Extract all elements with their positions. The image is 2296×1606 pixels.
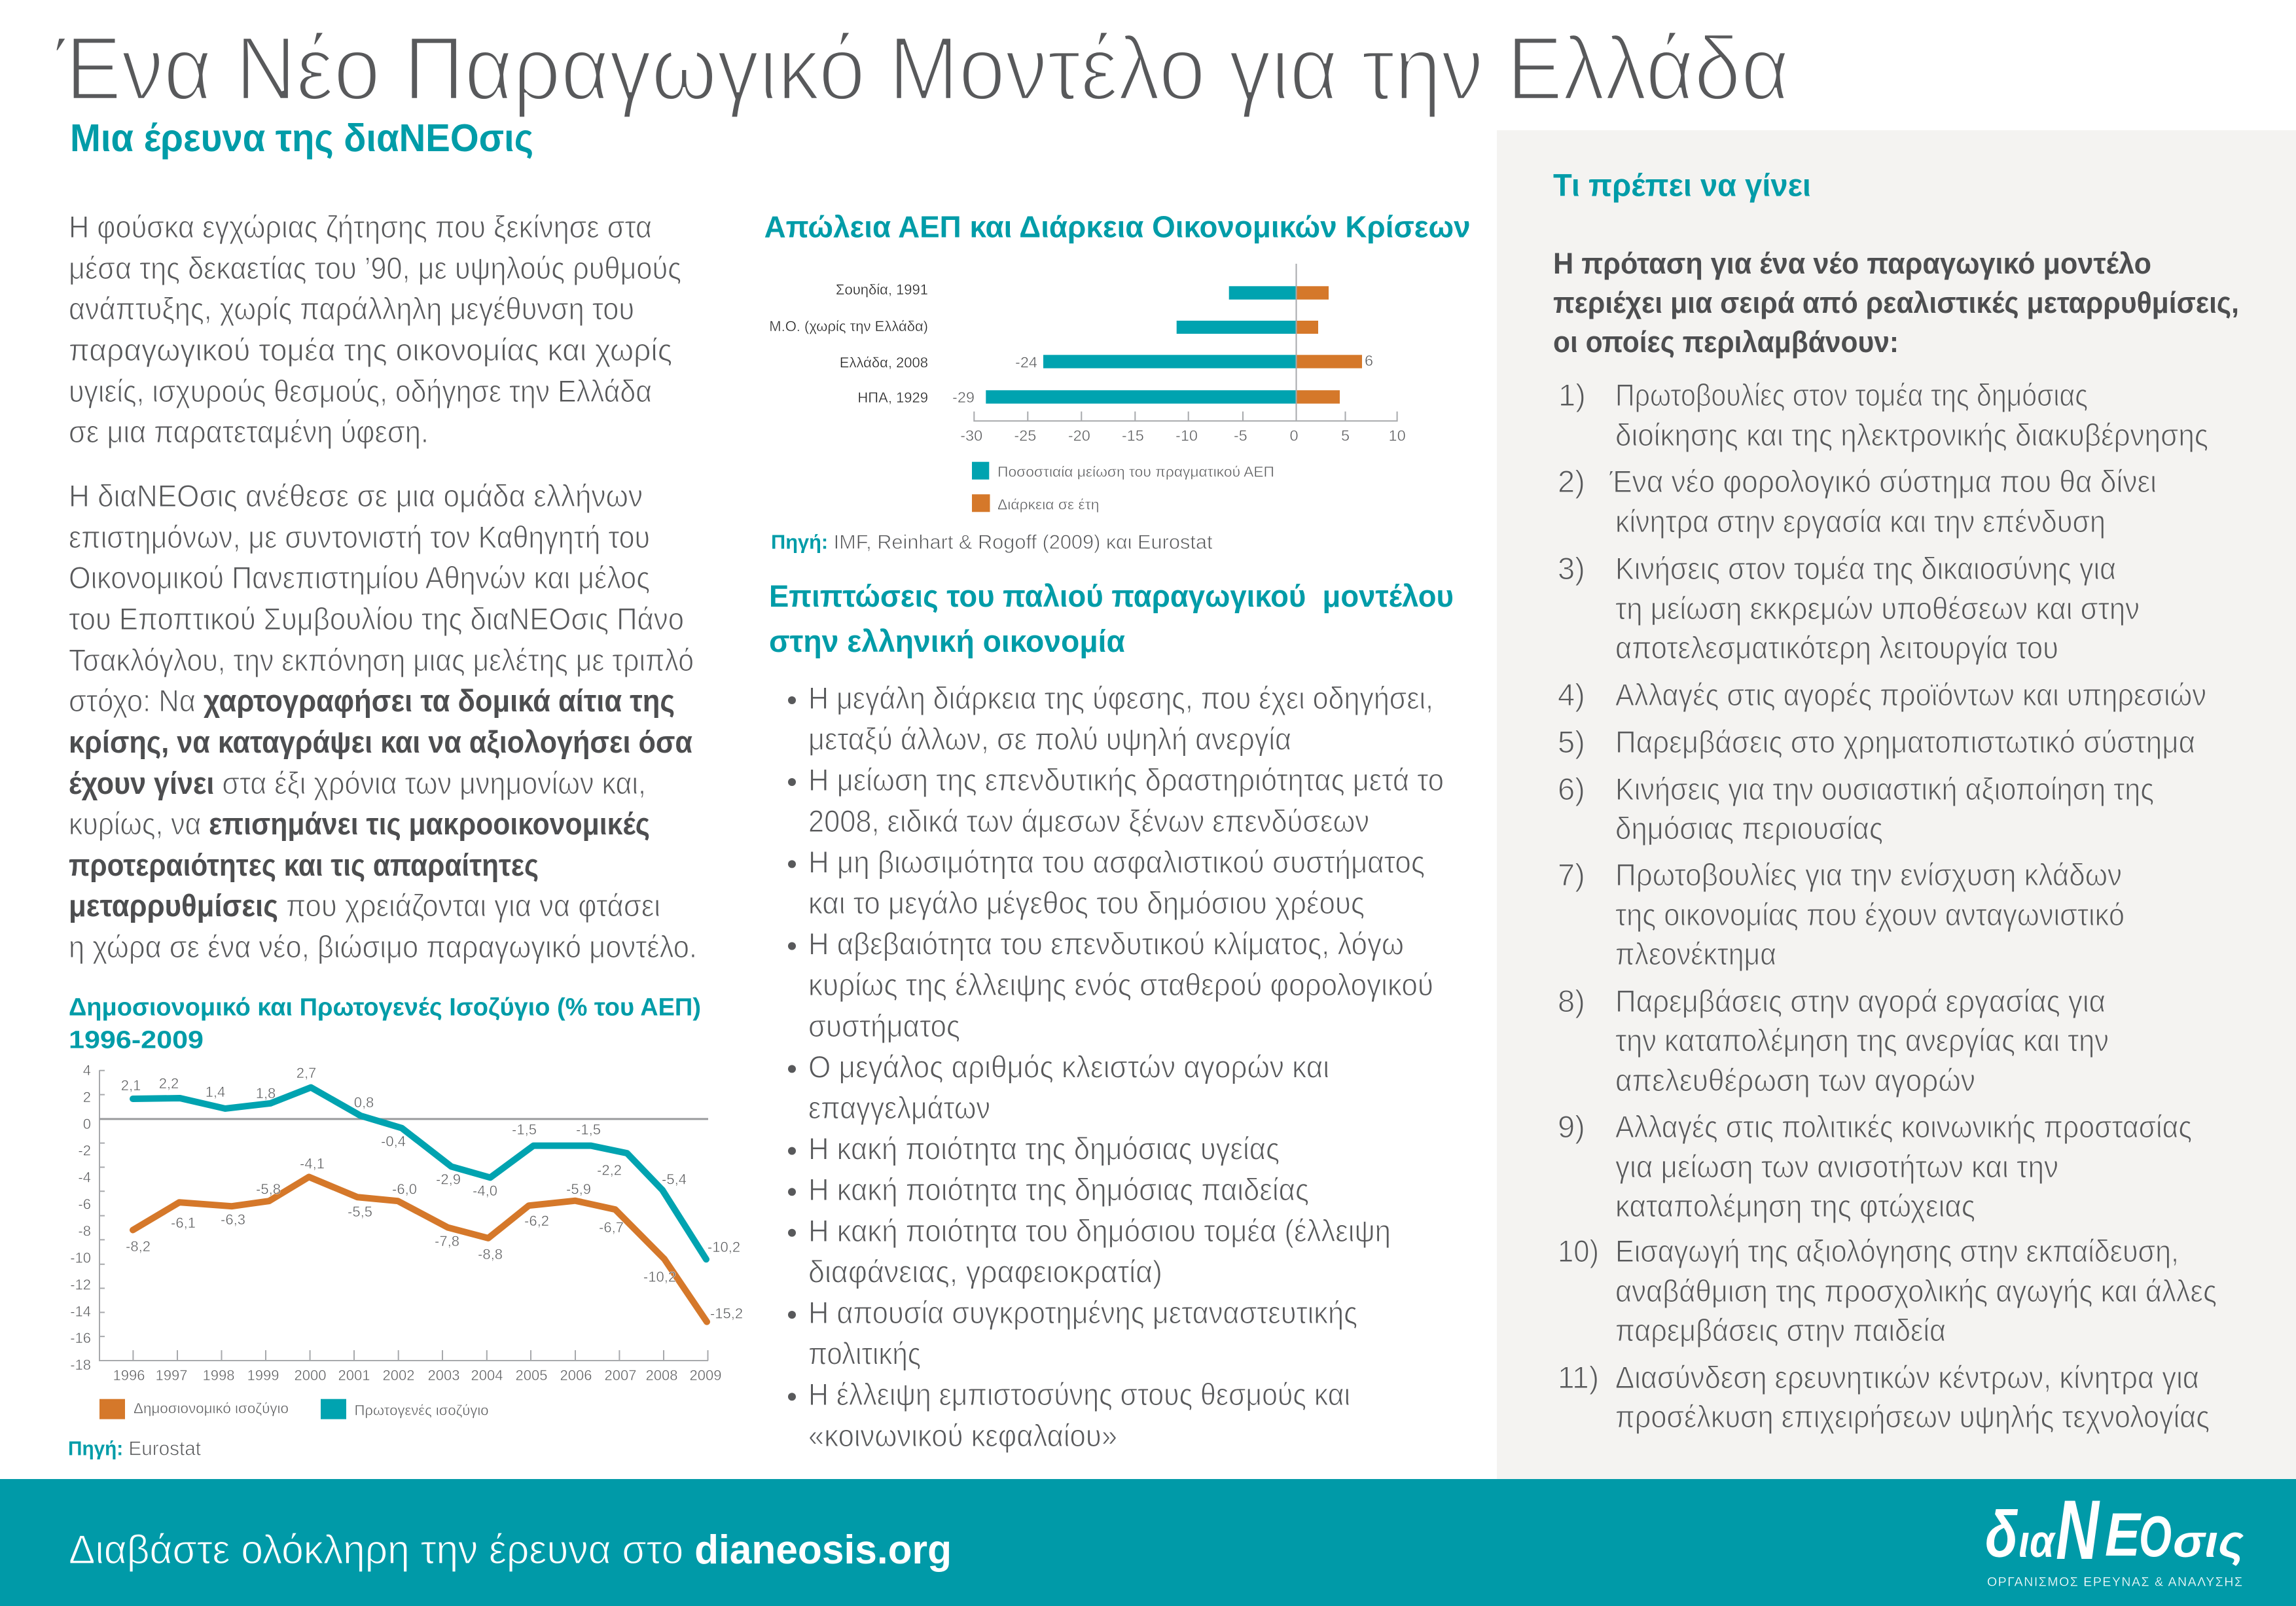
legend: Δημοσιονομικό ισοζύγιο	[134, 1401, 289, 1417]
numbered list: Διασύνδεση ερευνητικών κέντρων, κίνητρα για	[1615, 1360, 2199, 1395]
x axis labels: 2008	[646, 1367, 677, 1383]
numbered list: 5)	[1558, 724, 1585, 759]
bullet list: Η μη βιωσιμότητα του ασφαλιστικού συστήματος	[808, 844, 1425, 879]
primary balance data labels: 1,8	[256, 1085, 276, 1101]
numbered list: 6)	[1558, 772, 1585, 806]
x axis labels: -30	[960, 427, 982, 444]
primary balance data labels: -5,4	[662, 1171, 687, 1187]
logo: διαΝΕΟσις: ια	[2018, 1516, 2056, 1567]
legend: Διάρκεια σε έτη	[997, 496, 1100, 512]
fiscal balance data labels: -5,9	[566, 1181, 591, 1197]
fiscal balance data labels: -10,2	[643, 1269, 676, 1285]
primary balance data labels: 2,1	[121, 1077, 141, 1094]
bullet list: Η απουσία συγκροτημένης μεταναστευτικής	[808, 1295, 1357, 1330]
numbered list: 7)	[1558, 857, 1585, 892]
x axis labels: -15	[1122, 427, 1144, 444]
bold intro: περιέχει μια σειρά από ρεαλιστικές μεταρρυθμίσεις,	[1553, 286, 2239, 319]
heading: Τι πρέπει να γίνει	[1553, 169, 1811, 203]
logo: διαΝΕΟσις	[1985, 1483, 2244, 1589]
numbered list: 11)	[1558, 1360, 1599, 1395]
paragraph 1: μέσα της δεκαετίας του ’90, με υψηλούς ρυθμούς	[69, 251, 681, 285]
paragraph 2: επιστημόνων, με συντονιστή τον Καθηγητή του	[69, 520, 650, 554]
bullet list	[788, 681, 1444, 1453]
bar chart: GDP loss and crisis duration	[764, 209, 1471, 553]
x axis labels: 2005	[516, 1367, 547, 1383]
logo: διαΝΕΟσις: Ο	[2139, 1504, 2172, 1569]
logo: διαΝΕΟσις: Ε	[2105, 1500, 2142, 1569]
paragraph 1: υγιείς, ισχυρούς θεσμούς, οδήγησε την Ελλάδα	[69, 374, 652, 408]
numbered list: Αλλαγές στις πολιτικές κοινωνικής προστασίας	[1615, 1109, 2192, 1144]
paragraph 2: Οικονομικού Πανεπιστημίου Αθηνών και μέλος	[69, 560, 650, 595]
category labels: Μ.Ο. (χωρίς την Ελλάδα)	[769, 318, 928, 334]
x axis labels: 2003	[428, 1367, 459, 1383]
y axis labels: -2	[78, 1143, 91, 1159]
category labels	[769, 281, 928, 406]
line chart: budget balance	[68, 994, 743, 1459]
numbered list: Παρεμβάσεις στο χρηματοπιστωτικό σύστημα	[1615, 724, 2195, 759]
value labels: 6	[1365, 352, 1373, 369]
primary balance data labels: 0,8	[354, 1094, 374, 1111]
x axis labels: -10	[1175, 427, 1198, 444]
y axis labels: 2	[83, 1089, 91, 1105]
paragraph 2: προτεραιότητες και τις απαραίτητες	[69, 848, 539, 882]
value labels: -24	[1015, 354, 1037, 371]
primary balance data labels: -2,9	[436, 1171, 461, 1187]
footer band	[0, 1479, 2296, 1606]
y axis labels: -6	[78, 1196, 91, 1213]
chart heading: 1996-2009	[69, 1026, 204, 1054]
bullet list: 2008, ειδικά των άμεσων ξένων επενδύσεων	[808, 804, 1369, 838]
bullet list: κυρίως της έλλειψης ενός σταθερού φορολογικού	[808, 967, 1433, 1002]
fiscal balance data labels: -5,8	[256, 1181, 281, 1197]
paragraph 2: κρίσης, να καταγράψει και να αξιολογήσει όσα	[69, 724, 692, 759]
bullet list: Η κακή ποιότητα της δημόσιας παιδείας	[808, 1172, 1309, 1207]
x axis labels: 1996	[113, 1367, 145, 1383]
panel: consequences	[769, 579, 1454, 1453]
panel: what must be done	[1497, 130, 2296, 1479]
numbered list: Ένα νέο φορολογικό σύστημα που θα δίνει	[1609, 464, 2157, 499]
fiscal balance data labels: -7,8	[435, 1233, 459, 1249]
numbered list: 8)	[1558, 984, 1585, 1018]
x axis labels: 1997	[156, 1367, 187, 1383]
x axis labels: -5	[1234, 427, 1247, 444]
bullet list: «κοινωνικού κεφαλαίου»	[808, 1418, 1117, 1453]
subtitle: Μια έρευνα της διαΝΕΟσις	[70, 116, 533, 160]
y axis labels: -16	[70, 1330, 91, 1346]
y axis labels: -8	[78, 1222, 91, 1239]
chart heading: Απώλεια ΑΕΠ και Διάρκεια Οικονομικών Κρίσεων	[764, 209, 1471, 243]
heading	[769, 579, 1454, 658]
value labels: -29	[952, 389, 975, 406]
paragraph 2: του Εποπτικού Συμβουλίου της διαΝΕΟσις Πάνο	[69, 601, 684, 636]
legend	[972, 462, 1274, 512]
category labels: Σουηδία, 1991	[836, 281, 928, 298]
bullet list: Η αβεβαιότητα του επενδυτικού κλίματος, λόγω	[808, 927, 1404, 961]
primary balance data labels: -0,4	[381, 1133, 406, 1150]
y axis labels: -14	[70, 1303, 91, 1319]
fiscal balance data labels: -6,1	[171, 1215, 196, 1231]
x axis labels: -20	[1068, 427, 1090, 444]
source: Πηγή: Eurostat	[68, 1436, 201, 1459]
logo: διαΝΕΟσις: σις	[2173, 1516, 2244, 1567]
value labels	[952, 352, 1373, 406]
legend: Ποσοστιαία μείωση του πραγματικού ΑΕΠ	[997, 463, 1274, 480]
numbered list: καταπολέμηση της φτώχειας	[1615, 1188, 1975, 1223]
x axis labels: 2000	[295, 1367, 326, 1383]
x axis labels: 2006	[560, 1367, 592, 1383]
numbered list	[1558, 378, 2217, 1434]
numbered list: Κινήσεις στον τομέα της δικαιοσύνης για	[1615, 551, 2116, 586]
line: fiscal balance	[133, 1177, 707, 1322]
fiscal balance data labels: -6,7	[599, 1219, 624, 1236]
x axis labels: 1998	[203, 1367, 234, 1383]
numbered list: αποτελεσματικότερη λειτουργία του	[1615, 630, 2058, 665]
fiscal balance data labels: -15,2	[710, 1305, 743, 1321]
numbered list: αναβάθμιση της προσχολικής αγωγής και άλλες	[1615, 1274, 2217, 1308]
paragraph 1: παραγωγικού τομέα της οικονομίας και χωρίς	[69, 332, 672, 367]
numbered list: Παρεμβάσεις στην αγορά εργασίας για	[1615, 984, 2106, 1018]
primary balance data labels	[121, 1065, 740, 1255]
y axis labels	[70, 1062, 91, 1373]
numbered list: διοίκησης και της ηλεκτρονικής διακυβέρνησης	[1615, 418, 2208, 452]
x axis labels: 1999	[247, 1367, 279, 1383]
numbered list: 3)	[1558, 551, 1585, 586]
logo: διαΝΕΟσις: δ	[1985, 1498, 2018, 1571]
fiscal balance data labels: -6,0	[392, 1181, 417, 1197]
numbered list: προσέλκυση επιχειρήσεων υψηλής τεχνολογίας	[1615, 1399, 2210, 1434]
paragraph 1: Η φούσκα εγχώριας ζήτησης που ξεκίνησε στα	[69, 209, 652, 244]
paragraph 2: Η διαΝΕΟσις ανέθεσε σε μια ομάδα ελλήνων	[69, 478, 643, 513]
y axis labels: -12	[70, 1277, 91, 1293]
x axis labels: 5	[1341, 427, 1350, 444]
numbered list: 1)	[1558, 378, 1586, 412]
numbered list: Κινήσεις για την ουσιαστική αξιοποίηση της	[1615, 772, 2154, 806]
numbered list: Εισαγωγή της αξιολόγησης στην εκπαίδευση,	[1615, 1234, 2179, 1268]
y axis labels: -4	[78, 1169, 91, 1185]
source: Πηγή: IMF, Reinhart & Rogoff (2009) και Eurostat	[771, 530, 1213, 553]
numbered list: 2)	[1558, 464, 1585, 499]
logo: διαΝΕΟσις: ΟΡΓΑΝΙΣΜΟΣ ΕΡΕΥΝΑΣ & ΑΝΑΛΥΣΗΣ	[1987, 1575, 2242, 1589]
legend	[99, 1399, 488, 1419]
y axis labels: 4	[83, 1062, 91, 1079]
bullet list: Η μείωση της επενδυτικής δραστηριότητας μετά το	[808, 762, 1444, 797]
x axis labels	[113, 1367, 721, 1383]
panel: intro text	[69, 209, 697, 964]
paragraph 2: μεταρρυθμίσεις που χρειάζονται για να φτάσει	[69, 888, 660, 923]
numbered list: 10)	[1558, 1234, 1599, 1268]
category labels: Ελλάδα, 2008	[840, 355, 928, 371]
primary balance data labels: -10,2	[708, 1239, 740, 1255]
bold intro: οι οποίες περιλαμβάνουν:	[1553, 325, 1899, 359]
numbered list: την καταπολέμηση της ανεργίας και την	[1615, 1023, 2109, 1058]
fiscal balance data labels	[126, 1156, 743, 1321]
paragraph 1: ανάπτυξης, χωρίς παράλληλη μεγέθυνση του	[69, 291, 634, 326]
numbered list: απελευθέρωση των αγορών	[1615, 1063, 1975, 1097]
numbered list: παρεμβάσεις στην παιδεία	[1615, 1313, 1946, 1347]
numbered list: Αλλαγές στις αγορές προϊόντων και υπηρεσιών	[1615, 677, 2206, 712]
bullet list: πολιτικής	[808, 1336, 921, 1371]
numbered list: 9)	[1558, 1109, 1585, 1144]
fiscal balance data labels: -6,2	[524, 1213, 549, 1229]
line: primary balance	[133, 1088, 706, 1259]
primary balance data labels: 2,2	[159, 1075, 179, 1092]
chart heading: Δημοσιονομικό και Πρωτογενές Ισοζύγιο (% του ΑΕΠ)	[69, 994, 701, 1022]
x axis labels: 2001	[338, 1367, 370, 1383]
bullet list: Ο μεγάλος αριθμός κλειστών αγορών και	[808, 1049, 1329, 1084]
primary balance data labels: -2,2	[597, 1162, 622, 1178]
fiscal balance data labels: -5,5	[348, 1204, 372, 1220]
bold intro: Η πρόταση για ένα νέο παραγωγικό μοντέλο	[1553, 247, 2151, 280]
logo: διαΝΕΟσις: Ν	[2056, 1483, 2100, 1577]
bullet list: Η κακή ποιότητα της δημόσιας υγείας	[808, 1132, 1280, 1166]
x axis labels: 2009	[690, 1367, 721, 1383]
bars	[986, 286, 1362, 404]
y axis labels: 0	[83, 1116, 91, 1132]
bullet list: Η μεγάλη διάρκεια της ύφεσης, που έχει οδηγήσει,	[808, 681, 1433, 715]
bullet list: επαγγελμάτων	[808, 1090, 990, 1125]
x axis labels: 0	[1289, 427, 1299, 444]
heading: στην ελληνική οικονομία	[769, 624, 1125, 658]
heading: Επιπτώσεις του παλιού παραγωγικού μοντέλου	[769, 579, 1454, 613]
title: Ένα Νέο Παραγωγικό Μοντέλο για την Ελλάδα	[55, 18, 1789, 119]
numbered list: για μείωση των ανισοτήτων και την	[1615, 1149, 2058, 1184]
paragraph 2: κυρίως, να επισημάνει τις μακροοικονομικές	[69, 806, 650, 841]
bullet list: διαφάνειας, γραφειοκρατία)	[808, 1254, 1162, 1289]
numbered list: κίνητρα στην εργασία και την επένδυση	[1615, 504, 2106, 539]
y axis labels: -18	[70, 1357, 91, 1373]
legend: Πρωτογενές ισοζύγιο	[354, 1402, 488, 1419]
numbered list: της οικονομίας που έχουν ανταγωνιστικό	[1615, 897, 2125, 932]
x axis labels: 10	[1389, 427, 1406, 444]
bullet list: συστήματος	[808, 1008, 960, 1043]
paragraph 2: έχουν γίνει στα έξι χρόνια των μνημονίων και,	[69, 766, 646, 800]
paragraph 1	[69, 209, 681, 449]
bullet list: Η έλλειψη εμπιστοσύνης στους θεσμούς και	[808, 1377, 1350, 1412]
primary balance data labels: -1,5	[576, 1122, 601, 1138]
paragraph 2: η χώρα σε ένα νέο, βιώσιμο παραγωγικό μοντέλο.	[69, 929, 697, 964]
fiscal balance data labels: -6,3	[221, 1211, 245, 1228]
numbered list: τη μείωση εκκρεμών υποθέσεων και στην	[1615, 591, 2140, 626]
numbered list: 4)	[1558, 677, 1585, 712]
bullet list: μεταξύ άλλων, σε πολύ υψηλή ανεργία	[808, 722, 1291, 757]
bullet list: και το μεγάλο μέγεθος του δημόσιου χρέους	[808, 885, 1365, 920]
paragraph 2: στόχο: Να χαρτογραφήσει τα δομικά αίτια της	[69, 683, 675, 718]
paragraph 2	[69, 478, 697, 964]
x axis labels: 2004	[471, 1367, 503, 1383]
y axis labels: -10	[70, 1250, 91, 1266]
paragraph 1: σε μια παρατεταμένη ύφεση.	[69, 414, 429, 449]
fiscal balance data labels: -4,1	[300, 1156, 325, 1171]
x axis labels: 2002	[383, 1367, 414, 1383]
bold intro	[1553, 247, 2239, 359]
chart heading	[69, 994, 701, 1054]
primary balance data labels: -4,0	[473, 1183, 497, 1199]
primary balance data labels: 1,4	[206, 1084, 225, 1100]
category labels: ΗΠΑ, 1929	[857, 389, 928, 406]
numbered list: δημόσιας περιουσίας	[1615, 811, 1883, 846]
paragraph 2: Τσακλόγλου, την εκπόνηση μιας μελέτης με τριπλό	[69, 643, 694, 677]
x axis labels	[960, 427, 1406, 444]
call to action: Διαβάστε ολόκληρη την έρευνα στο dianeosis.org	[69, 1527, 952, 1573]
x axis labels: -25	[1014, 427, 1036, 444]
x axis labels: 2007	[605, 1367, 636, 1383]
numbered list: Πρωτοβουλίες για την ενίσχυση κλάδων	[1615, 857, 2122, 892]
numbered list: πλεονέκτημα	[1615, 937, 1776, 971]
fiscal balance data labels: -8,2	[126, 1238, 151, 1255]
fiscal balance data labels: -8,8	[478, 1246, 503, 1262]
primary balance data labels: 2,7	[296, 1065, 316, 1081]
primary balance data labels: -1,5	[512, 1122, 537, 1138]
numbered list: Πρωτοβουλίες στον τομέα της δημόσιας	[1615, 378, 2088, 412]
bullet list: Η κακή ποιότητα του δημόσιου τομέα (έλλειψη	[808, 1213, 1391, 1248]
